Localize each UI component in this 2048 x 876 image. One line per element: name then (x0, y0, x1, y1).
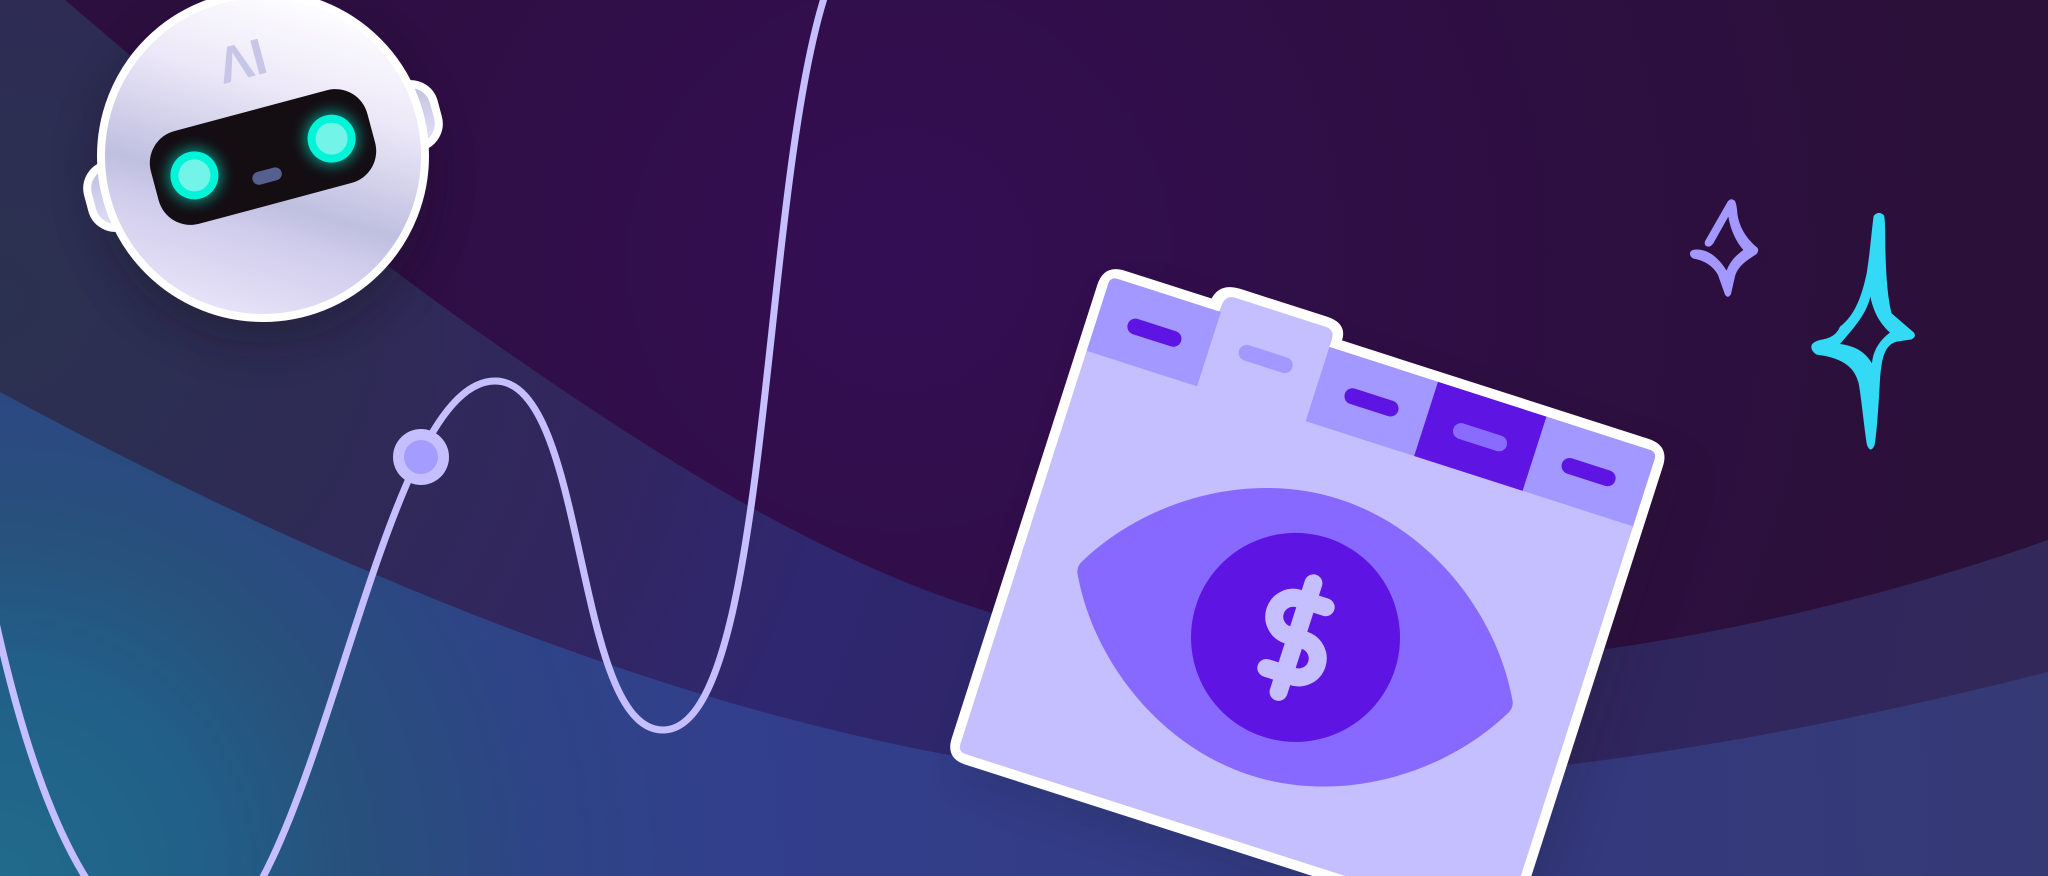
tab strip (1087, 277, 1657, 526)
tab 5 (1523, 417, 1657, 526)
robot head (82, 0, 444, 343)
tab label pill 4 (1451, 421, 1509, 453)
tab label pill 2 (1237, 343, 1295, 375)
browser card with eye (942, 247, 1694, 876)
dollar sign (1252, 575, 1340, 700)
AI label: ΛI (211, 27, 273, 95)
tab label pill 5 (1559, 456, 1618, 488)
nose (251, 166, 283, 186)
card outline (945, 247, 1675, 876)
head sphere (101, 0, 425, 318)
curve (0, 0, 825, 876)
sparkle: cyan (1811, 213, 1915, 449)
ears (82, 79, 444, 233)
pupil (1164, 506, 1427, 769)
card body (958, 259, 1662, 876)
tab label pill 3 (1342, 386, 1401, 419)
eye shape (1034, 430, 1556, 845)
left eye (161, 142, 227, 208)
right eye (299, 106, 365, 172)
tab 3 (1306, 347, 1438, 456)
background: lower band (0, 392, 2048, 876)
tab label pill 1 (1125, 317, 1184, 349)
node (393, 429, 449, 485)
tab 4 (1414, 382, 1547, 491)
tab 1 (1087, 277, 1221, 386)
visor (142, 82, 384, 232)
sparkle: purple (1690, 199, 1758, 297)
chart line with node (0, 0, 825, 876)
